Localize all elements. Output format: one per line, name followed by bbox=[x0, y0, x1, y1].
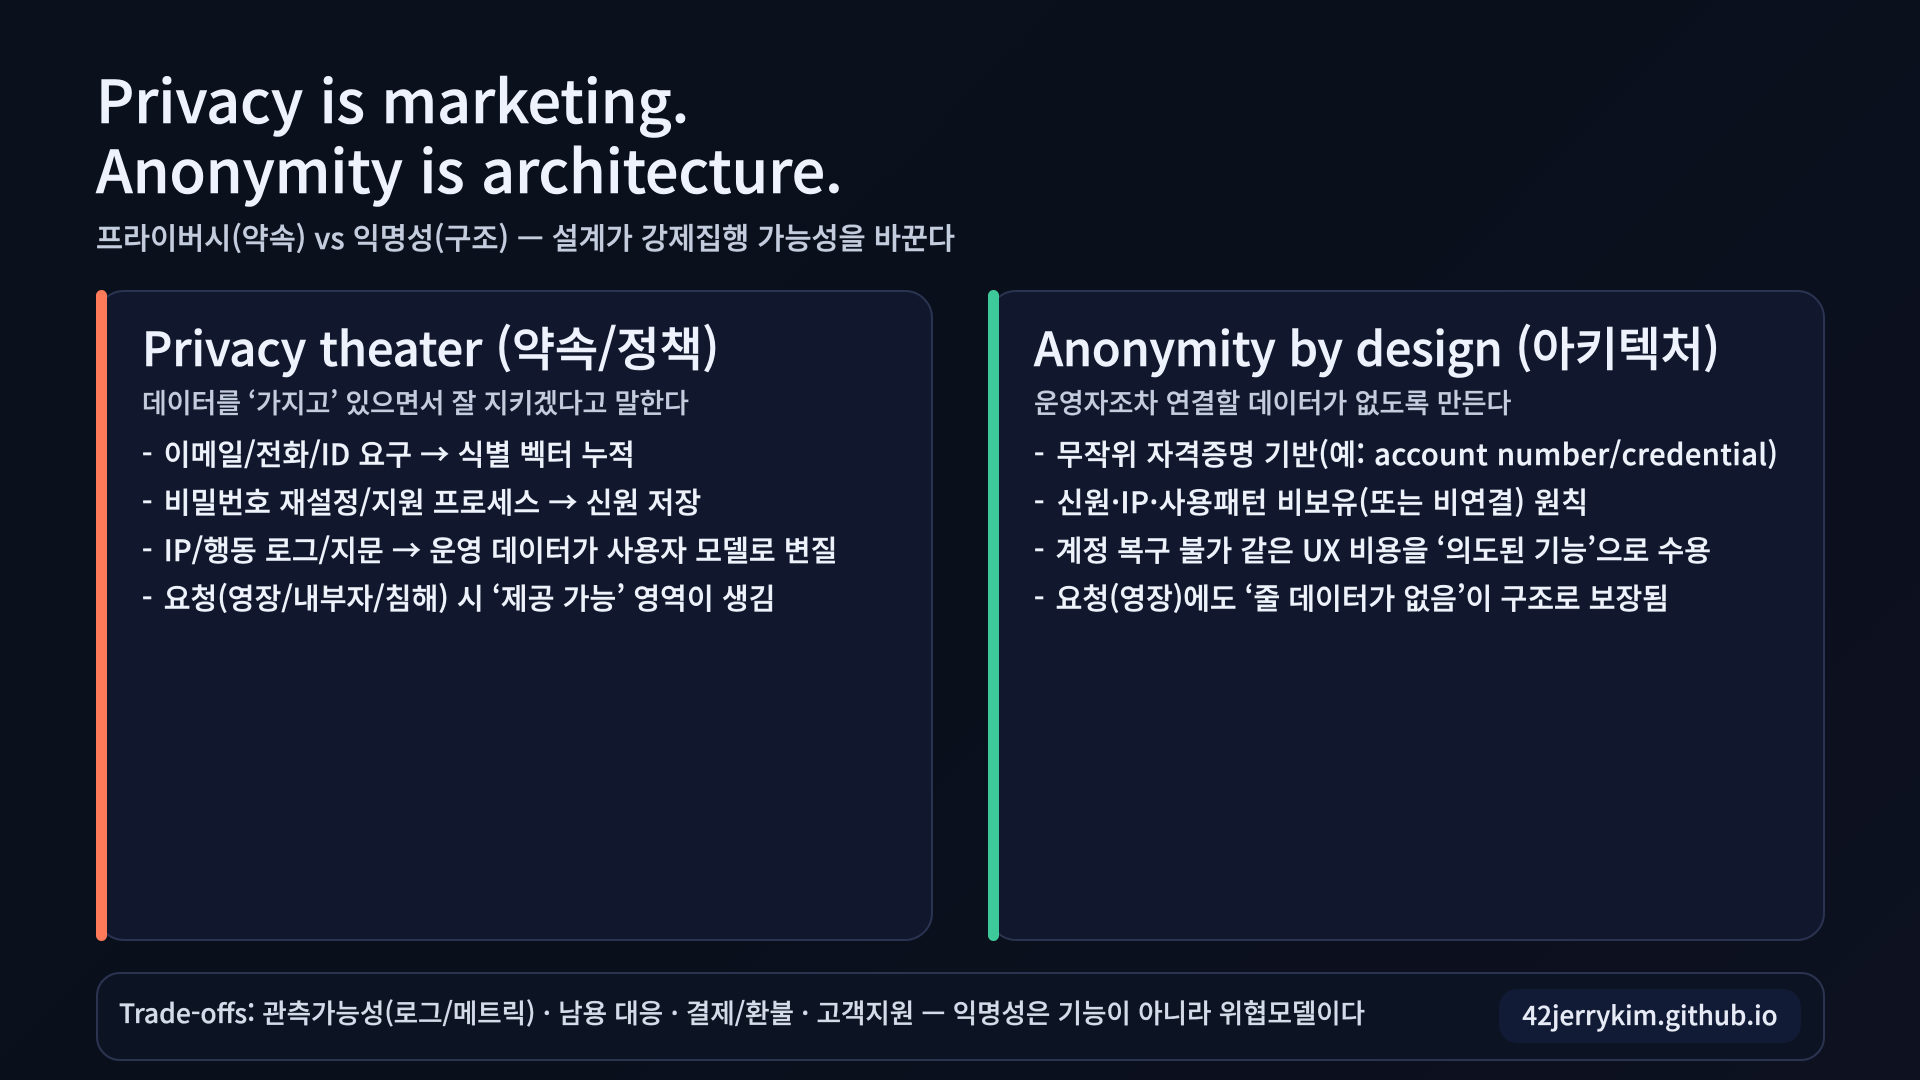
list: privacy theater: 이메일/전화/ID 요구 → 식별 벡터 누적 bbox=[164, 432, 635, 474]
list: anonymity by design: - bbox=[1034, 576, 1044, 618]
panel: privacy theater bbox=[96, 290, 933, 941]
source pill: 42jerrykim.github.io bbox=[1522, 996, 1778, 1033]
list: privacy theater: - bbox=[142, 480, 153, 522]
list: privacy theater: - bbox=[142, 576, 153, 618]
title: Privacy is marketing. bbox=[96, 55, 689, 140]
list: anonymity by design: 신원·IP·사용패턴 비보유(또는 비연결) 원칙 bbox=[1057, 480, 1589, 522]
subtitle: 프라이버시(약속) vs 익명성(구조) — 설계가 강제집행 가능성을 바꾼다 bbox=[96, 216, 955, 258]
accent bar: anonymity by design bbox=[988, 290, 999, 941]
list: anonymity by design: - bbox=[1034, 480, 1045, 522]
list: privacy theater: 비밀번호 재설정/지원 프로세스 → 신원 저장 bbox=[164, 480, 701, 522]
list: privacy theater: - bbox=[142, 432, 153, 474]
list: anonymity by design: 요청(영장)에도 ‘줄 데이터가 없음’이 구조로 보장됨 bbox=[1056, 576, 1669, 618]
list: anonymity by design: 무작위 자격증명 기반(예: account number/credential) bbox=[1056, 432, 1778, 474]
title: Anonymity is architecture. bbox=[96, 125, 843, 210]
heading: privacy theater: Privacy theater (약속/정책) bbox=[142, 313, 719, 380]
source pill bbox=[1499, 989, 1801, 1043]
list: privacy theater: IP/행동 로그/지문 → 운영 데이터가 사용자 모델로 변질 bbox=[164, 528, 838, 570]
footer bar bbox=[96, 972, 1825, 1061]
list: anonymity by design: - bbox=[1034, 528, 1044, 570]
list: anonymity by design bbox=[1034, 432, 1778, 618]
title bbox=[96, 55, 843, 210]
list: privacy theater: 요청(영장/내부자/침해) 시 ‘제공 가능’ 영역이 생김 bbox=[164, 576, 776, 618]
panel: anonymity by design bbox=[988, 290, 1825, 941]
lead text: anonymity by design: 운영자조차 연결할 데이터가 없도록 만든다 bbox=[1034, 382, 1511, 421]
list: privacy theater: - bbox=[142, 528, 153, 570]
list: anonymity by design: - bbox=[1034, 432, 1045, 474]
accent bar: privacy theater bbox=[96, 290, 107, 941]
list: privacy theater bbox=[142, 432, 838, 618]
footer text: Trade-offs: 관측가능성(로그/메트릭) · 남용 대응 · 결제/환불 · 고객지원 — 익명성은 기능이 아니라 위협모델이다 bbox=[119, 992, 1365, 1031]
lead text: privacy theater: 데이터를 ‘가지고’ 있으면서 잘 지키겠다고 말한다 bbox=[142, 382, 689, 421]
list: anonymity by design: 계정 복구 불가 같은 UX 비용을 ‘의도된 기능’으로 수용 bbox=[1056, 528, 1711, 570]
heading: anonymity by design: Anonymity by design (아키텍처) bbox=[1034, 313, 1720, 380]
